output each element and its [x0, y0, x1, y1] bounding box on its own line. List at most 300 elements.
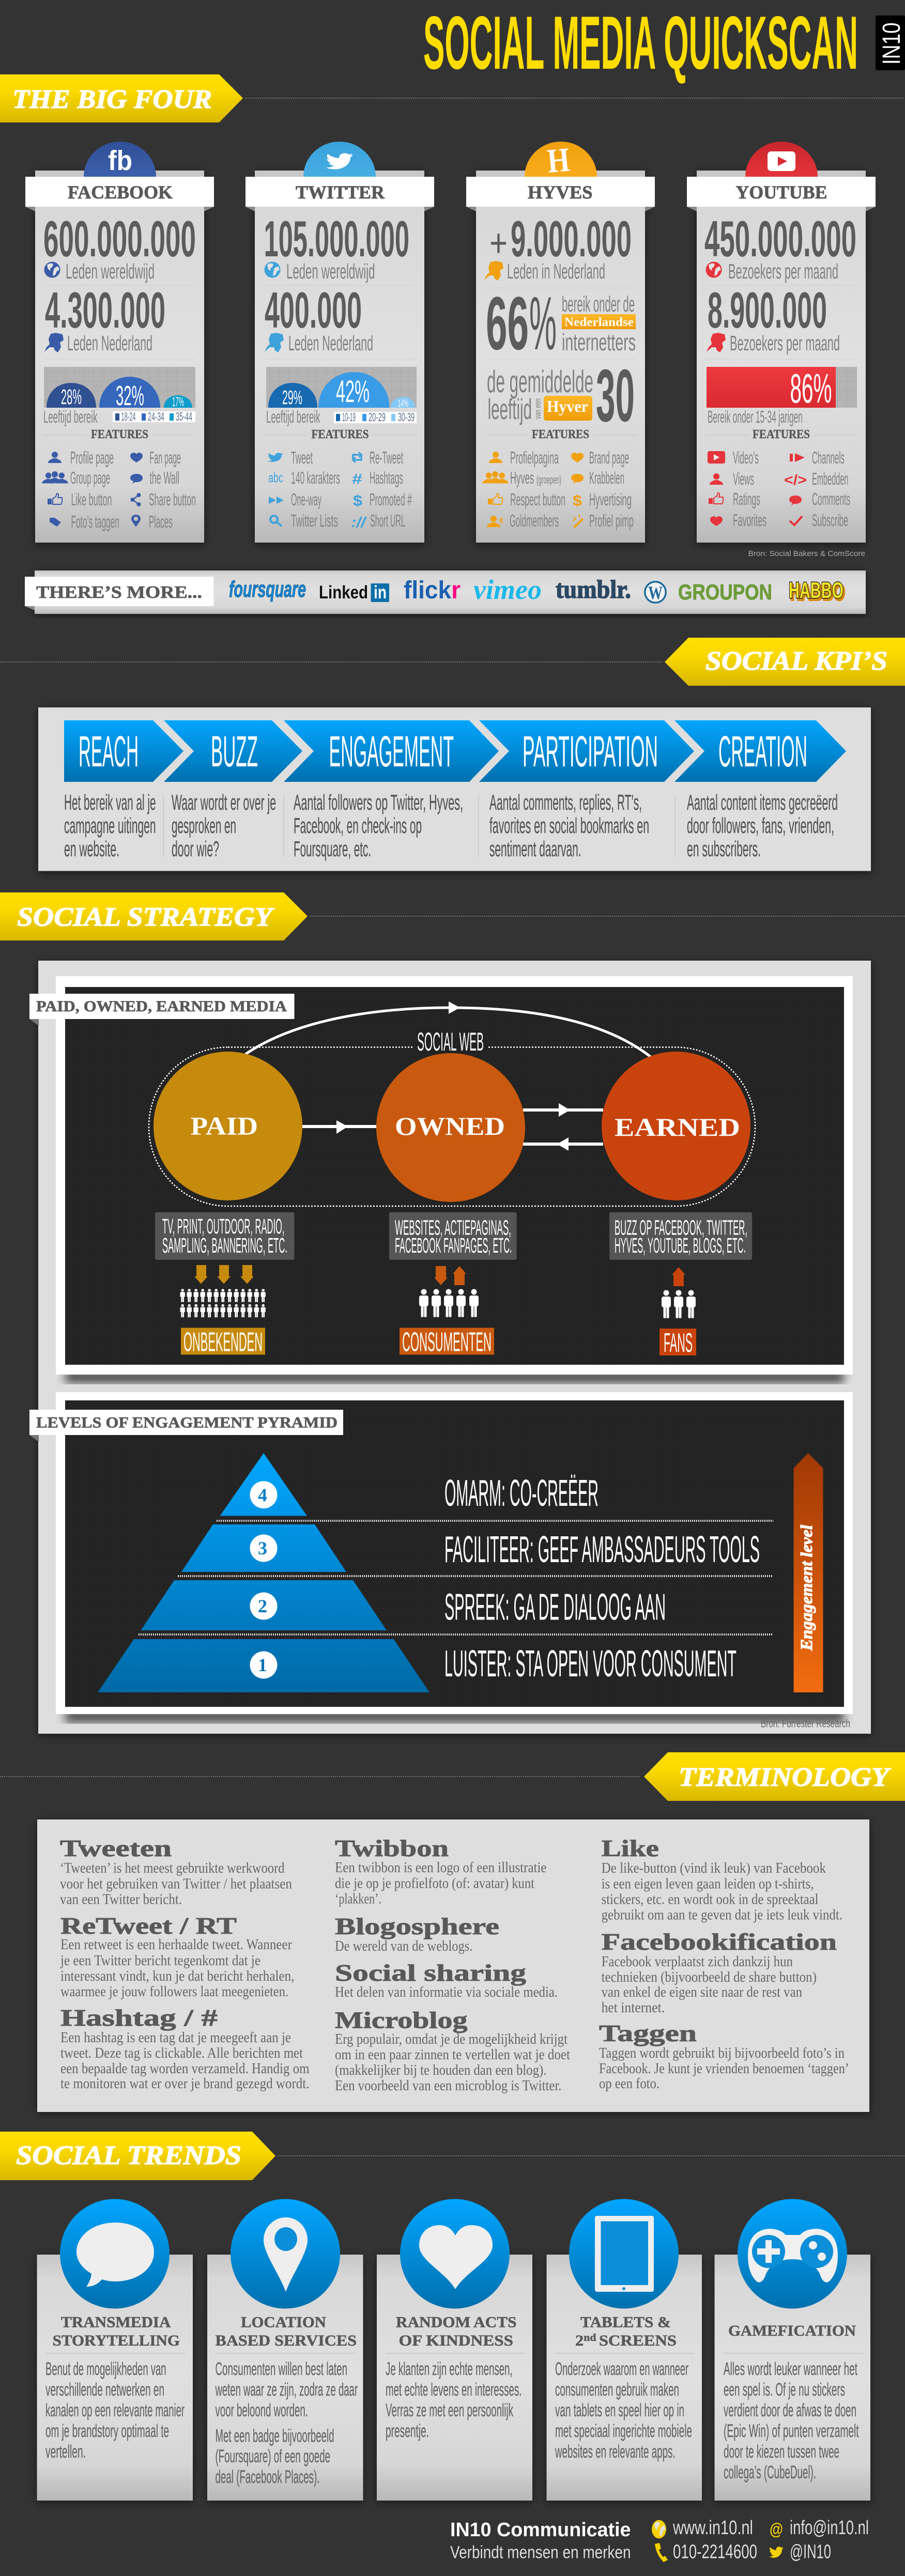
- stat: leden Nederland: 400.000: [265, 282, 362, 338]
- arrow: Reach: REACH: [79, 727, 139, 776]
- term: Hashtag: Een hashtag is een tag dat je meegeeft aan je: [60, 2029, 291, 2046]
- feature: Hyves (groepen): Hyves (groepen): [510, 468, 561, 487]
- panel: paid, owned, earned media: SAMPLING, BANNERING, ETC.: [162, 1233, 287, 1257]
- term: ReTweet: je een Twitter bericht tegenkomt dat je: [60, 1952, 260, 1969]
- logo: Habbo: HABBO: [789, 578, 843, 603]
- pyramid level 1: [98, 1639, 430, 1692]
- term: ReTweet: interessant vindt, kun je dat bericht herhalen,: [60, 1968, 295, 1984]
- term: Twibbon: Twibbon: [335, 1835, 449, 1861]
- feature: Ratings: [709, 489, 760, 508]
- term: Tweeten: voor het gebruiken van Twitter / het plaatsen: [60, 1876, 292, 1892]
- stat: leden wereldwijd: 105.000.000: [264, 210, 409, 267]
- logo: foursquare: foursquare: [229, 577, 306, 602]
- stat: bezoekers wereldwijd: [704, 210, 857, 285]
- term: Hashtag: tweet. Deze tag is clickable. Alle berichten met: [60, 2045, 303, 2061]
- description: met speciaal ingerichte mobiele: [555, 2421, 692, 2441]
- text: participation description: favorites en social bookmarks en: [489, 813, 649, 838]
- stat: leden Nederland: Leden Nederland: [288, 331, 373, 355]
- panel: Hyves card: bereik onder de: [562, 292, 635, 317]
- term: Social sharing: Het delen van informatie via sociale media.: [335, 1984, 558, 2000]
- panel: social KPIs: Het bereik van al je: [64, 790, 156, 814]
- heading: [215, 2314, 357, 2349]
- stat: leden wereldwijd: 600.000.000: [43, 210, 196, 267]
- panel: Facebook card: Group page: [70, 468, 110, 487]
- feature: Short URL: ://: [351, 514, 367, 530]
- chart: leeftijd bereik: [43, 367, 195, 426]
- term: Tweeten: [60, 1835, 292, 1908]
- feature: Hyvertising: $: [573, 492, 582, 510]
- stat: 66% bereik: internetters: [562, 329, 636, 356]
- term: Social sharing: [335, 1960, 558, 2000]
- panel: social KPIs: [38, 707, 871, 871]
- heading: 2: [575, 2332, 583, 2349]
- description: Onderzoek waarom en wanneer: [555, 2359, 688, 2379]
- description: van tablets en speel hier op in: [555, 2400, 684, 2420]
- label: onbekenden: [181, 1327, 265, 1357]
- description: kanalen op een relevante manier: [45, 2400, 185, 2420]
- features heading: FEATURES: [532, 428, 589, 441]
- logo: Habbo: HABBO: [790, 580, 845, 605]
- term: ReTweet: [60, 1912, 295, 2000]
- feature: Foto's taggen: [50, 512, 119, 531]
- contact: email: info@in10.nl: [790, 2517, 869, 2539]
- description: [215, 2359, 358, 2487]
- heading tag: paid owned earned media: [29, 994, 295, 1026]
- text: buzz description: Waar wordt er over je: [172, 790, 276, 814]
- feature: Profile page: [48, 448, 114, 467]
- feature: Embedden: </>: [784, 472, 807, 488]
- term: Tweeten: Tweeten: [60, 1835, 172, 1861]
- term: Like: stickers, etc. en wordt ook in de spreektaal: [602, 1891, 819, 1908]
- text: participation description: Aantal comments, replies, RT’s,: [489, 790, 642, 814]
- term: Facebookification: [602, 1929, 837, 2016]
- stat: 66% bereik: [486, 281, 636, 365]
- stat: 66% bereik: Nederlandse: [564, 316, 634, 329]
- contact: phone: 010-2214600: [673, 2541, 757, 2563]
- term: Microblog: [335, 2007, 570, 2094]
- stat: leden wereldwijd: Leden wereldwijd: [286, 259, 375, 283]
- banner: the big four: [0, 74, 905, 122]
- heading: [53, 2314, 180, 2349]
- features heading: FEATURES: [311, 428, 369, 441]
- banner: social trends: SOCIAL TRENDS: [16, 2141, 241, 2170]
- term: Microblog: (makkelijker bij te houden dan een blog).: [335, 2062, 547, 2078]
- heading: OF KINDNESS: [399, 2332, 513, 2349]
- description: [724, 2359, 859, 2482]
- text: buzz description: door wie?: [172, 837, 219, 861]
- circle: earned: EARNED: [615, 1113, 740, 1142]
- panel: Twitter card: One-way: [291, 490, 321, 509]
- term: ReTweet: Een retweet is een herhaalde tweet. Wanneer: [60, 1936, 292, 1953]
- term: Microblog: Een voorbeeld van een microblog is Twitter.: [335, 2077, 561, 2094]
- term: Twibbon: Een twibbon is een logo of een illustratie: [335, 1859, 547, 1876]
- panel: YouTube card: Embedden: [812, 469, 849, 488]
- label: consumenten: [400, 1327, 494, 1357]
- feature: Twitter Lists: Twitter Lists: [291, 511, 338, 530]
- feature: 140 karakters: [268, 468, 340, 487]
- panel: Facebook card: Share button: [149, 490, 196, 509]
- stat: 66% bereik: %: [529, 281, 557, 365]
- feature: Comments: [789, 489, 850, 508]
- people: paid audience: [180, 1289, 266, 1317]
- banner: social KPI's: SOCIAL KPI’S: [705, 646, 887, 676]
- term: Hashtag: Hashtag / #: [60, 2004, 218, 2031]
- stat: leden Nederland: [44, 282, 195, 359]
- arrow: earned to owned: [523, 1137, 603, 1151]
- stat: 66% bereik: 66: [486, 281, 529, 365]
- term: Taggen: Facebook. Je kunt je vrienden benoemen ‘taggen’: [599, 2060, 849, 2077]
- feature: Views: [710, 469, 754, 488]
- pyramid level 2: [141, 1580, 387, 1630]
- panel: levels of engagement pyramid: [29, 1392, 853, 1722]
- panel: YouTube card: Comments: [812, 489, 850, 508]
- box: earned channels: [609, 1212, 752, 1260]
- arrow: Participation: PARTICIPATION: [523, 727, 658, 776]
- people: earned audience: [662, 1290, 696, 1318]
- panel: paid, owned, earned media: [29, 976, 853, 1382]
- stat: leden wereldwijd: Leden wereldwijd: [66, 259, 155, 283]
- logo: Habbo: [789, 578, 845, 605]
- stat: gemiddelde leeftijd 30: leeftijd: [488, 393, 532, 425]
- pyramid level 3: [181, 1524, 346, 1572]
- text: engagement description: Aantal followers op Twitter, Hyves,: [294, 790, 463, 814]
- description: Benut de mogelijkheden van: [45, 2359, 166, 2379]
- logo: vimeo: vimeo: [473, 574, 542, 605]
- label: fans: [659, 1328, 696, 1358]
- panel: Hyves card: Krabbelen: [589, 468, 624, 487]
- chart: bereik 86%: [707, 365, 857, 426]
- source note: pyramid: Bron: Forrester Research: [761, 1717, 850, 1730]
- feature: Favorites: [710, 511, 766, 530]
- text: engagement description: [294, 790, 463, 861]
- stat: gemiddelde leeftijd 30: van een: [533, 398, 543, 419]
- panel: Hyves card: Goldmembers: [510, 511, 559, 530]
- panel: there's more: THERE’S MORE...: [36, 583, 202, 602]
- heading tag: paid owned earned media: PAID, OWNED, EARNED MEDIA: [36, 998, 287, 1015]
- arrow: Buzz: [164, 720, 302, 782]
- panel: Facebook card: Foto’s taggen: [71, 512, 119, 531]
- chart: leeftijd bereik: 42%: [336, 374, 370, 409]
- contact: email: [770, 2517, 869, 2539]
- panel: paid, owned, earned media: ONBEKENDEN: [183, 1327, 263, 1357]
- heading: BASED SERVICES: [215, 2332, 357, 2349]
- panel: Twitter card: Promoted #: [370, 490, 412, 509]
- feature: Share button: [130, 490, 196, 509]
- feature: Twitter Lists: [270, 511, 338, 530]
- term: Like: is een eigen leven gaan leiden op t-shirts,: [602, 1876, 814, 1892]
- panel: Hyves card: Respect button: [510, 490, 565, 509]
- term: Like: Like: [602, 1835, 659, 1861]
- panel: Twitter card: Short URL: [370, 511, 405, 530]
- heading: STORYTELLING: [53, 2332, 180, 2349]
- panel: Hyves card: [466, 141, 655, 543]
- feature: Short URL: [351, 511, 405, 530]
- feature: Video's: [708, 448, 759, 467]
- term: Hashtag: [60, 2004, 310, 2092]
- feature: Like button: [48, 490, 112, 509]
- heading tag: pyramid: [29, 1410, 343, 1442]
- description: consumenten gebruik maken: [555, 2380, 679, 2400]
- panel: social strategy background: [38, 961, 871, 1734]
- chart: leeftijd bereik: 35-44: [176, 410, 192, 423]
- term: Facebookification: het internet.: [602, 1999, 665, 2016]
- description: vertellen.: [45, 2442, 86, 2462]
- description: websites en relevante apps.: [555, 2442, 676, 2462]
- arrow: Buzz: BUZZ: [211, 727, 258, 776]
- chart: leeftijd bereik: Leeftijd bereik: [43, 407, 98, 426]
- arrows: paid down: [194, 1265, 254, 1284]
- panel: paid, owned, earned media: WEBSITES, ACTIEPAGINAS,: [395, 1216, 511, 1240]
- panel: terminology: [37, 1819, 869, 2112]
- box: owned channels: [389, 1212, 517, 1260]
- trend card: location based services: [207, 2199, 363, 2501]
- term: Social sharing: Social sharing: [335, 1960, 526, 1986]
- stat: gemiddelde leeftijd 30: Hyver: [547, 397, 588, 415]
- arrow: paid to owned: [302, 1120, 376, 1134]
- panel: levels of engagement pyramid: OMARM: CO-CREËER: [444, 1473, 599, 1514]
- panel: Twitter card: [246, 142, 434, 543]
- panel: YouTube card: Subscribe: [812, 511, 848, 530]
- feature: Profielpagina: [489, 448, 559, 467]
- chart: leeftijd bereik: 29%: [282, 387, 302, 409]
- description: weten waar ze zijn, zodra ze daar: [215, 2380, 358, 2400]
- feature: Hashtags: [352, 468, 403, 487]
- icon: speech bubble: [76, 2223, 154, 2287]
- footer: [450, 2517, 869, 2563]
- term: Twibbon: ‘plakken’.: [335, 1890, 381, 1907]
- stat: leden in Nederland: [484, 210, 636, 288]
- panel: YouTube card: Favorites: [733, 511, 766, 530]
- banner: social KPI's: [0, 638, 905, 686]
- panel: Twitter card: Tweet: [291, 448, 313, 467]
- term: Microblog: Microblog: [335, 2007, 467, 2033]
- description: om je brandstory optimaal te: [45, 2421, 169, 2441]
- panel: YouTube card: Views: [733, 469, 754, 488]
- text: reach description: campagne uitingen: [64, 813, 156, 838]
- heading: [575, 2314, 677, 2349]
- icon: YouTube play: [768, 151, 795, 171]
- social web dotted boundary: SOCIAL WEB: [417, 1027, 484, 1056]
- panel: YouTube card: [687, 142, 876, 543]
- icon: tablet: [595, 2216, 654, 2292]
- feature: Fan page: [130, 448, 181, 467]
- text: engagement description: Facebook, en check-ins op: [294, 813, 422, 838]
- features heading: FEATURES: [91, 428, 148, 441]
- trend card: transmedia storytelling: [37, 2199, 193, 2501]
- panel: paid, owned, earned media: TV, PRINT, OUTDOOR, RADIO,: [162, 1214, 284, 1238]
- term: Blogosphere: Blogosphere: [335, 1913, 499, 1939]
- stat: gemiddelde leeftijd 30: [487, 354, 635, 437]
- people: owned audience: [419, 1289, 479, 1317]
- chart: leeftijd bereik: [266, 367, 417, 426]
- arrows: owned down and up: [434, 1266, 466, 1285]
- icon: heart: [419, 2225, 493, 2289]
- description: deal (Facebook Places).: [215, 2467, 319, 2487]
- description: Verras ze met een persoonlijk: [386, 2400, 513, 2420]
- arrow: paid to earned arc: [246, 1001, 651, 1057]
- panel: YouTube card: Channels: [812, 448, 845, 467]
- chart: leeftijd bereik: 30-39: [398, 410, 415, 424]
- term: Taggen: [599, 2020, 849, 2092]
- arrow: Participation: [479, 720, 694, 782]
- panel: Facebook card: Places: [149, 512, 173, 531]
- term: Facebookification: Facebook verplaatst zich dankzij hun: [602, 1953, 793, 1970]
- description: voor beloond worden.: [215, 2400, 308, 2420]
- logo: tumblr: tumblr.: [556, 575, 631, 604]
- panel: Facebook card: Fan page: [150, 448, 181, 467]
- feature: Goldmembers: €: [499, 516, 504, 525]
- term: Microblog: om in een paar zinnen te vertellen wat je doet: [335, 2046, 570, 2063]
- term: Twibbon: die je op je profielfoto (of: avatar) kunt: [335, 1875, 534, 1891]
- feature: Promoted #: $: [353, 492, 362, 510]
- banner: terminology: [0, 1752, 905, 1801]
- text: buzz description: gesproken en: [172, 813, 236, 838]
- arrow: Creation: [674, 720, 846, 782]
- chart: bereik 86%: 86%: [790, 365, 832, 411]
- contact: website: www.in10.nl: [672, 2517, 753, 2539]
- heading: Hyves: HYVES: [528, 182, 592, 203]
- arrow: engagement level: [794, 1453, 823, 1692]
- term: Hashtag: te monitoren wat er over je brand gezegd wordt.: [60, 2075, 309, 2092]
- stat: leden Nederland: Leden Nederland: [67, 331, 152, 355]
- description: [45, 2359, 185, 2462]
- panel: there's more: [25, 570, 866, 614]
- icon: location pin: [264, 2217, 308, 2292]
- icon: Hyves H: H: [546, 141, 571, 180]
- text: creation description: [687, 790, 838, 861]
- term: Taggen: Taggen: [599, 2020, 697, 2046]
- term: Facebookification: Facebookification: [602, 1929, 837, 1955]
- chart: leeftijd bereik: Leeftijd bereik: [266, 407, 320, 426]
- term: Hashtag: een bepaalde tag worden verzameld. Handig om: [60, 2060, 310, 2077]
- term: Tweeten: van een Twitter bericht.: [60, 1891, 182, 1908]
- logo: Groupon: GROUPON: [678, 580, 772, 604]
- heading: Twitter: TWITTER: [296, 182, 385, 203]
- feature: Places: [131, 512, 173, 531]
- trend card: random acts of kindness: [377, 2199, 532, 2501]
- panel: Facebook card: [25, 142, 214, 543]
- feature: Tweet: [268, 448, 313, 467]
- features heading: FEATURES: [753, 428, 810, 441]
- feature: Embedden: [784, 469, 849, 488]
- contact: email: @: [770, 2520, 783, 2538]
- feature: Subscribe: [790, 511, 848, 530]
- panel: Facebook card: Like button: [71, 490, 112, 509]
- arrow: engagement level: Engagement level: [797, 1525, 816, 1651]
- heading: RANDOM ACTS: [396, 2314, 517, 2331]
- chart: leeftijd bereik: 28%: [61, 385, 82, 409]
- panel: YouTube card: Video’s: [733, 448, 759, 467]
- arrow: earned up: [672, 1267, 685, 1286]
- stat: leden in Nederland: Leden in Nederland: [507, 259, 605, 283]
- feature: Hyvertising: [573, 490, 632, 510]
- banner: social trends: [0, 2132, 905, 2180]
- source note: big four: Bron: Social Bakers & ComScore: [748, 549, 865, 558]
- icon: twitter bird: [326, 153, 353, 169]
- feature: Channels: [790, 448, 845, 467]
- icon: game controller: [748, 2229, 838, 2282]
- contact: website: [652, 2517, 753, 2539]
- term: Blogosphere: [335, 1913, 499, 1954]
- term: Tweeten: ‘Tweeten’ is het meest gebruikte werkwoord: [60, 1860, 285, 1876]
- text: reach description: [64, 790, 156, 861]
- banner: social strategy: [0, 892, 905, 940]
- feature: One-way: [269, 490, 321, 509]
- tagline: Verbindt mensen en merken: [450, 2543, 631, 2563]
- feature: Group page: [42, 468, 110, 487]
- feature: Promoted #: [353, 490, 412, 510]
- term: Microblog: Erg populair, omdat je de mogelijkheid krijgt: [335, 2031, 567, 2047]
- feature: Respect button: [488, 490, 565, 509]
- term: Like: De like-button (vind ik leuk) van Facebook: [602, 1860, 826, 1876]
- stat: gemiddelde leeftijd 30: de gemiddelde: [487, 364, 593, 399]
- panel: Twitter card: Re-Tweet: [370, 448, 403, 467]
- description: Je klanten zijn echte mensen,: [386, 2359, 513, 2379]
- banner: social strategy: SOCIAL STRATEGY: [17, 902, 275, 932]
- stat: leden in Nederland: 9.000.000: [511, 210, 632, 267]
- text: engagement description: Foursquare, etc.: [294, 837, 371, 861]
- term: ReTweet: waarmee je jouw followers laat meegenieten.: [60, 1983, 288, 2000]
- circle: paid: [154, 1052, 302, 1200]
- text: buzz description: [172, 790, 276, 861]
- circle: owned: OWNED: [395, 1112, 505, 1140]
- arrow: Reach: [64, 720, 183, 782]
- trend card: gamefication: [714, 2199, 870, 2501]
- feature: Goldmembers: [487, 511, 559, 530]
- feature: Brand page: [571, 448, 629, 467]
- stat: leden Nederland: [264, 282, 415, 359]
- description: [386, 2359, 522, 2441]
- arrow: Engagement: ENGAGEMENT: [329, 727, 454, 776]
- arrow: Engagement: [284, 720, 499, 782]
- panel: YouTube card: Ratings: [733, 489, 760, 508]
- text: participation description: [489, 790, 649, 861]
- circle: owned: [376, 1053, 525, 1202]
- panel: Facebook card: Profile page: [70, 448, 114, 467]
- term: Like: [602, 1835, 842, 1923]
- pyramid level 4: 4: [258, 1485, 267, 1505]
- heading: LOCATION: [241, 2314, 326, 2331]
- feature: Hyves (groepen): [482, 468, 561, 487]
- banner: terminology: TERMINOLOGY: [679, 1763, 892, 1792]
- company name: IN10 Communicatie: [450, 2519, 631, 2541]
- text: creation description: en subscribers.: [687, 837, 761, 861]
- description: presentje.: [386, 2421, 429, 2441]
- text: reach description: en website.: [64, 837, 119, 861]
- pyramid level 1: 1: [258, 1655, 267, 1675]
- contact: phone: [655, 2541, 757, 2563]
- term: Taggen: Taggen wordt gebruikt bij bijvoorbeeld foto’s in: [599, 2045, 845, 2061]
- panel: Twitter card: Hashtags: [370, 468, 403, 487]
- description: Met een badge bijvoorbeeld: [215, 2426, 334, 2446]
- chart: leeftijd bereik: 10-19: [342, 410, 356, 424]
- description: verschillende netwerken en: [45, 2380, 164, 2400]
- term: Blogosphere: De wereld van de weblogs.: [335, 1938, 472, 1954]
- heading: SCREENS: [599, 2332, 677, 2349]
- arrow: owned to earned: [523, 1103, 603, 1117]
- feature: 140 karakters: abc: [268, 470, 283, 485]
- chart: leeftijd bereik: 24-34: [148, 410, 164, 423]
- text: participation description: sentiment daarvan.: [489, 837, 581, 861]
- panel: Twitter card: 140 karakters: [291, 468, 340, 487]
- contact: twitter: [769, 2541, 831, 2563]
- panel: Facebook card: the Wall: [150, 468, 179, 487]
- box: paid channels: [155, 1212, 295, 1260]
- term: Twibbon: [335, 1835, 547, 1907]
- social web dotted boundary: [149, 1027, 755, 1206]
- description: collega’s (CubeDuel).: [724, 2462, 816, 2482]
- stat: bezoekers Nederland: [706, 282, 857, 359]
